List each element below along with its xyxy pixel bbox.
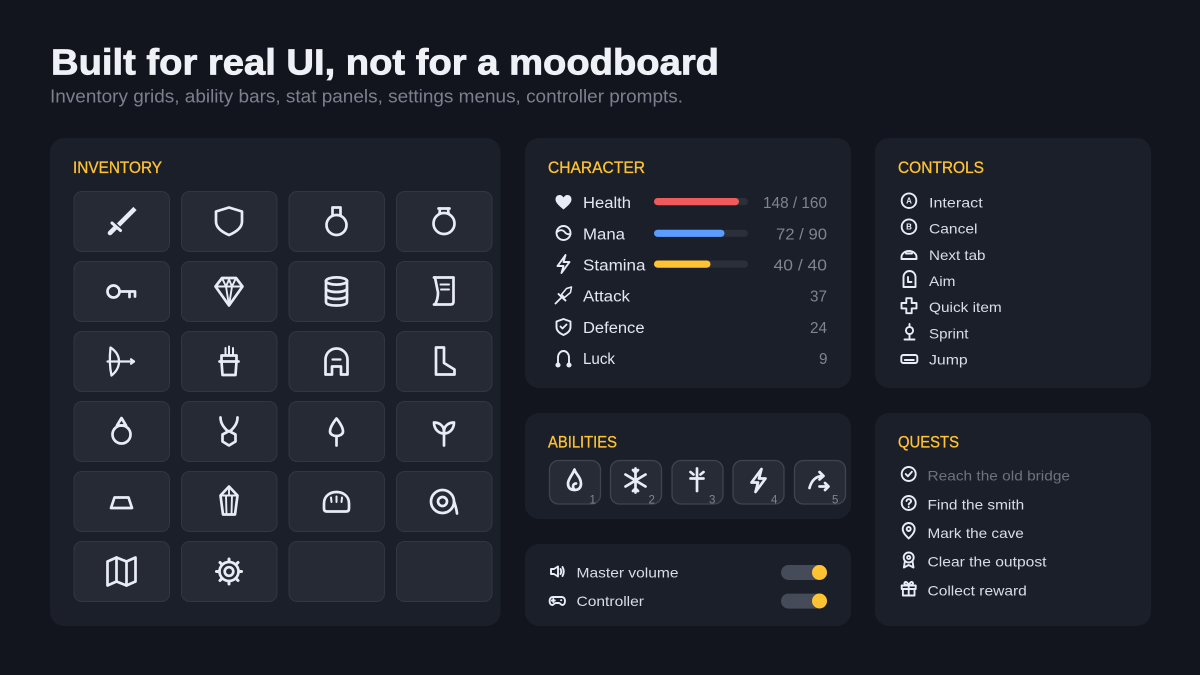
- control: quick item: Quick item: [929, 299, 1002, 315]
- quest: clear the outpost: [904, 552, 1047, 570]
- stat: mana: Mana: [583, 226, 625, 243]
- icon: bow: [108, 348, 134, 376]
- icon: coil: [431, 490, 457, 514]
- ability slot 2: snowflake: [610, 460, 662, 506]
- quest: find the smith: Find the smith: [928, 496, 1024, 512]
- control: cancel: Cancel: [929, 220, 978, 236]
- control: interact: A: [906, 197, 912, 206]
- icon: sword: [110, 208, 135, 233]
- subtitle: Inventory grids, ability bars, stat panels, settings menus, controller prompts.: [50, 87, 683, 107]
- icon: helmet: [326, 348, 348, 374]
- control: cancel: [902, 219, 978, 236]
- icon: bread: [324, 492, 349, 512]
- icon: ring: [112, 418, 130, 444]
- stat: stamina: 40 / 40: [774, 258, 827, 274]
- control: sprint: [904, 324, 969, 342]
- quest: reach the old bridge: Reach the old bridge: [928, 468, 1070, 484]
- control: jump: [901, 352, 968, 368]
- heading: character: CHARACTER: [548, 159, 645, 177]
- setting: controller: Controller: [576, 593, 644, 609]
- quest: mark the cave: [903, 523, 1024, 541]
- icon: tree: [330, 418, 343, 446]
- ability slot 2: snowflake: 2: [648, 494, 655, 506]
- title: Built for real UI, not for a moodboard: [51, 41, 719, 82]
- icon: crystal: [220, 486, 238, 514]
- stat: defence: 24: [810, 320, 827, 337]
- icon: round flask: [326, 208, 346, 235]
- quest: mark the cave: Mark the cave: [928, 525, 1024, 541]
- quest: clear the outpost: Clear the outpost: [928, 554, 1047, 570]
- stat: health: 148 / 160: [763, 195, 827, 212]
- setting: controller: [550, 593, 827, 609]
- stat: stamina: [558, 255, 827, 274]
- inventory grid: [74, 192, 492, 602]
- control: aim: Aim: [929, 273, 956, 289]
- stat: attack: [556, 287, 827, 306]
- stat: attack: 37: [810, 289, 827, 306]
- control: cancel: B: [906, 223, 912, 232]
- heading: controls: CONTROLS: [898, 159, 984, 177]
- stat: luck: 9: [819, 351, 828, 368]
- stat: attack: Attack: [583, 289, 630, 306]
- stat: defence: Defence: [583, 320, 644, 337]
- icon: gem: [216, 278, 242, 306]
- panel: character: [525, 138, 851, 388]
- icon: shield: [216, 208, 242, 235]
- ability slot 5: redirect arrow: [794, 460, 846, 506]
- panel: abilities: [525, 413, 851, 519]
- stat: defence: [556, 319, 827, 337]
- panel: controls: [875, 138, 1151, 388]
- stat: mana: [556, 226, 827, 243]
- stat: health: Health: [583, 195, 631, 212]
- ability slot 1: flame: 1: [590, 494, 596, 506]
- panel: quests: [875, 413, 1151, 626]
- stat: health: [556, 195, 827, 212]
- icon: boot: [436, 348, 454, 374]
- icon: key: [108, 286, 135, 298]
- ability slot 4: lightning: [733, 460, 784, 506]
- control: interact: [902, 193, 983, 210]
- quest: collect reward: Collect reward: [928, 582, 1027, 598]
- icon: gear: [216, 559, 242, 584]
- heading: inventory: INVENTORY: [73, 159, 162, 177]
- icon: sprout: [434, 422, 454, 446]
- control: aim: [904, 271, 956, 289]
- icon: coin stack: [326, 277, 347, 306]
- quest: collect reward: [902, 582, 1027, 598]
- ability slot 1: flame: [550, 460, 600, 506]
- panel: inventory: [50, 138, 500, 626]
- control: interact: Interact: [929, 194, 983, 210]
- control: jump: Jump: [929, 352, 968, 368]
- control: next tab: Next tab: [929, 247, 986, 263]
- heading: quests: QUESTS: [898, 434, 959, 452]
- control: quick item: [902, 298, 1002, 315]
- icon: map: [108, 558, 136, 586]
- control: sprint: Sprint: [929, 326, 969, 342]
- icon: quiver: [220, 346, 238, 375]
- icon: potion: [434, 208, 454, 234]
- ability slot 3: trident: [672, 460, 723, 506]
- icon: scroll: [434, 278, 454, 304]
- stat: mana: 72 / 90: [776, 226, 827, 243]
- ability slot 5: redirect arrow: 5: [832, 494, 838, 506]
- panel: settings: [525, 544, 851, 626]
- stat: luck: [556, 351, 828, 368]
- setting: master volume: Master volume: [576, 564, 679, 580]
- stat: luck: Luck: [583, 351, 615, 368]
- control: next tab: [902, 247, 986, 263]
- icon: amulet: [220, 418, 238, 446]
- stat: stamina: Stamina: [583, 258, 646, 274]
- heading: abilities: ABILITIES: [548, 434, 617, 452]
- setting: master volume: [551, 564, 827, 580]
- ability slot 4: lightning: 4: [771, 494, 778, 506]
- icon: ingot: [111, 498, 132, 508]
- ability slot 3: trident: 3: [709, 494, 715, 506]
